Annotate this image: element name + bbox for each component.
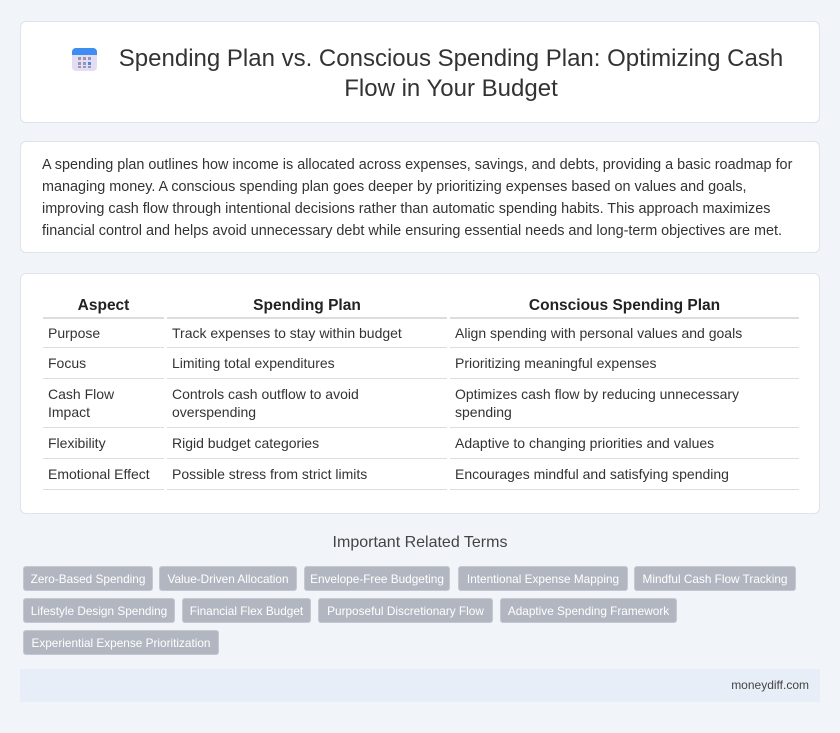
title: Spending Plan vs. Conscious Spending Plan: Optimizing Cash Flow in Your Budget bbox=[119, 45, 783, 102]
tags: Envelope-Free Budgeting bbox=[310, 572, 444, 586]
related terms heading: Important Related Terms bbox=[333, 534, 507, 551]
comparison table: Optimizes cash flow by reducing unnecessary spending bbox=[455, 386, 739, 420]
tags: Intentional Expense Mapping bbox=[467, 572, 619, 586]
comparison table: Spending Plan bbox=[253, 297, 361, 314]
comparison table: Limiting total expenditures bbox=[172, 355, 335, 371]
comparison table: Cash Flow Impact bbox=[48, 386, 114, 420]
tags: Value-Driven Allocation bbox=[167, 572, 289, 586]
comparison table: Align spending with personal values and goals bbox=[455, 325, 742, 341]
tags: Zero-Based Spending bbox=[31, 572, 145, 586]
tags: Purposeful Discretionary Flow bbox=[327, 604, 484, 618]
tags: Lifestyle Design Spending bbox=[31, 604, 167, 618]
comparison table card bbox=[20, 273, 820, 514]
comparison table: Aspect bbox=[78, 297, 129, 314]
comparison table: Focus bbox=[48, 355, 86, 371]
tags: Financial Flex Budget bbox=[190, 604, 303, 618]
icon: calendar bbox=[72, 48, 97, 71]
comparison table: Prioritizing meaningful expenses bbox=[455, 355, 657, 371]
footer: moneydiff.com bbox=[731, 678, 809, 692]
comparison table: Adaptive to changing priorities and values bbox=[455, 435, 714, 451]
comparison table: Flexibility bbox=[48, 435, 106, 451]
comparison table: Controls cash outflow to avoid overspending bbox=[172, 386, 359, 420]
tags: Experiential Expense Prioritization bbox=[31, 636, 210, 650]
comparison table: Encourages mindful and satisfying spending bbox=[455, 466, 729, 482]
comparison table: Conscious Spending Plan bbox=[529, 297, 720, 314]
tags: Mindful Cash Flow Tracking bbox=[643, 572, 787, 586]
comparison table: Purpose bbox=[48, 325, 100, 341]
comparison table: Rigid budget categories bbox=[172, 435, 319, 451]
comparison table: Emotional Effect bbox=[48, 466, 150, 482]
comparison table: Possible stress from strict limits bbox=[172, 466, 367, 482]
footer bbox=[20, 669, 820, 702]
comparison table bbox=[43, 297, 799, 490]
tags: Adaptive Spending Framework bbox=[508, 604, 669, 618]
header card bbox=[20, 21, 820, 123]
comparison table: Track expenses to stay within budget bbox=[172, 325, 402, 341]
description card bbox=[20, 141, 820, 253]
description text: A spending plan outlines how income is allocated across expenses, savings, and debts, providing a basic roadmap for managing money. A conscious spending plan goes deeper by prioritizing expenses based on values and goals, improving cash flow through intentional decisions rather than automatic spending habits. This approach maximizes financial control and helps avoid unnecessary debt while ensuring essential needs and long-term objectives are met. bbox=[42, 157, 792, 239]
